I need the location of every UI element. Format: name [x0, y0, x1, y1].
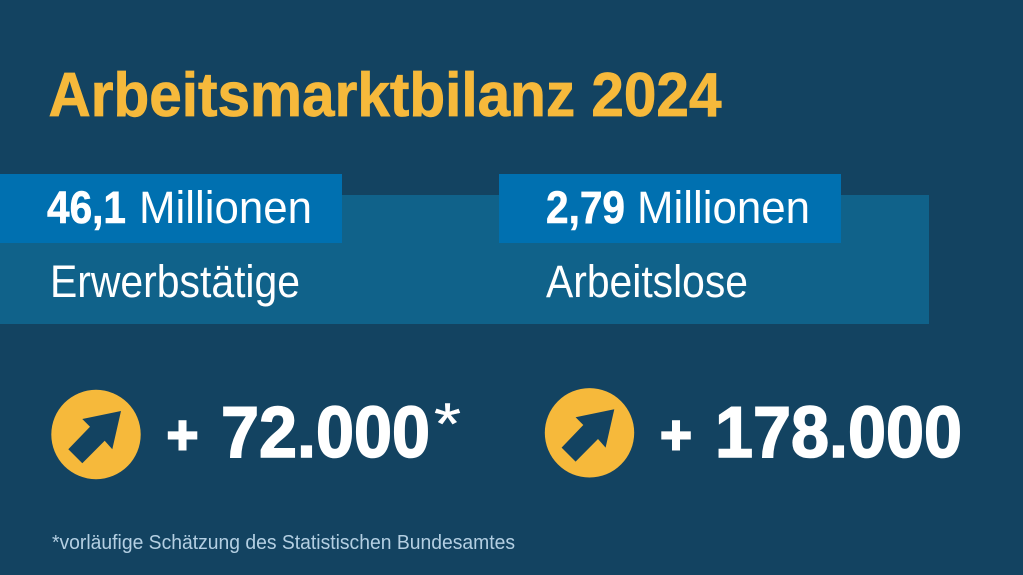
figure: 46,1 Millionen: Millionen — [139, 182, 312, 233]
panel: Erwerbstätige — [0, 174, 342, 307]
figure: 46,1 Millionen: 46,1 — [47, 182, 126, 233]
change: + 178.000: + — [660, 403, 692, 466]
figure: 2,79 Millionen — [546, 182, 810, 233]
change: + 72.000: + — [166, 403, 198, 466]
panel: statistics band — [0, 195, 929, 324]
panel: Arbeitslose — [499, 174, 841, 307]
title: Arbeitsmarktbilanz 2024 — [48, 61, 722, 130]
change: + 72.000: * — [434, 392, 461, 457]
figure: 46,1 Millionen — [47, 182, 312, 233]
change: + 178.000: 178.000 — [715, 393, 962, 473]
label: Erwerbstätige: Erwerbstätige — [50, 256, 300, 307]
highlight bar: employed total — [0, 174, 342, 243]
icon: arrow up, employed — [51, 390, 141, 479]
figure: 2,79 Millionen: Millionen — [637, 182, 810, 233]
change: + 72.000: 72.000 — [221, 393, 430, 473]
highlight bar: unemployed total — [499, 174, 841, 243]
figure: 2,79 Millionen: 2,79 — [546, 182, 625, 233]
icon: arrow up, unemployed — [545, 388, 634, 477]
footnote: *vorläufige Schätzung des Statistischen Bundesamtes — [52, 531, 515, 554]
label: Arbeitslose: Arbeitslose — [546, 256, 748, 307]
